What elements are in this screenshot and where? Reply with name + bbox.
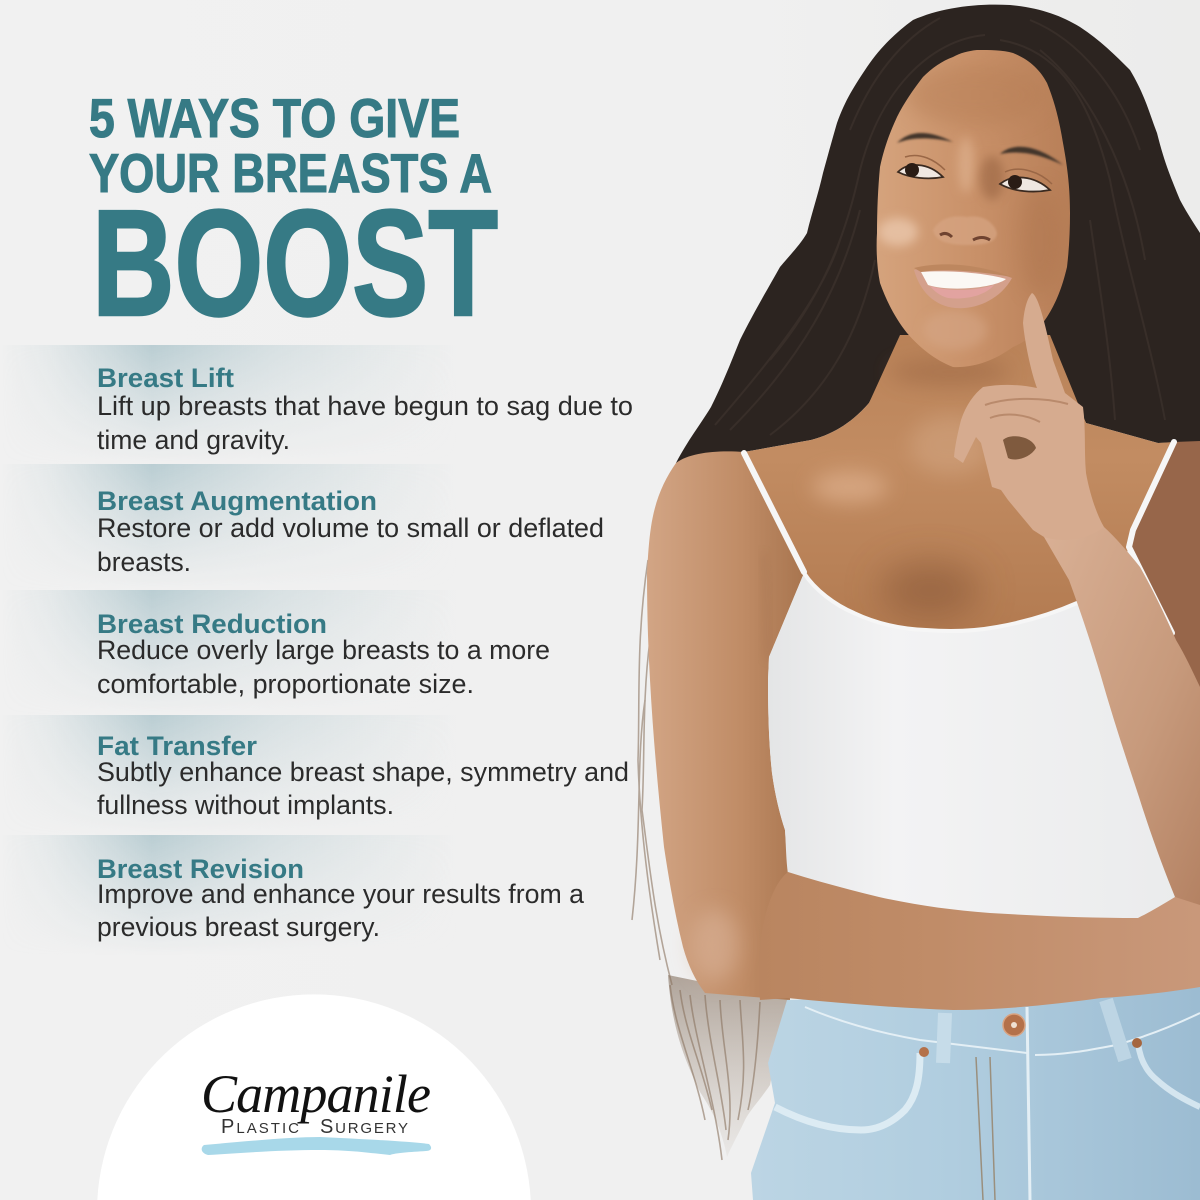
title: YOUR BREASTS A xyxy=(89,142,492,204)
logo: Campanile Plastic Surgery xyxy=(201,1064,431,1155)
nostrils xyxy=(940,233,990,240)
item: Breast Reduction: Reduce overly large breasts to a more xyxy=(97,635,550,665)
forehead tone xyxy=(908,70,995,120)
cheek and nose highlights xyxy=(878,137,987,350)
logo: Campanile Plastic Surgery: SURGERY xyxy=(320,1116,408,1138)
head and face xyxy=(876,50,1070,367)
item: Breast Augmentation: Restore or add volume to small or deflated xyxy=(97,513,604,543)
left arm and shoulder xyxy=(647,451,804,1000)
item: Breast Augmentation: Breast Augmentation xyxy=(97,486,377,516)
logo: Campanile Plastic Surgery: Campanile xyxy=(201,1064,431,1124)
long wispy hair behind the arm xyxy=(632,560,790,1160)
item: Fat Transfer: fullness without implants. xyxy=(97,790,394,820)
title: BOOST xyxy=(92,178,498,347)
item: Breast Reduction: comfortable, proportionate size. xyxy=(97,669,474,699)
nose xyxy=(933,216,997,245)
skin right of the strap xyxy=(1129,441,1200,700)
item: Fat Transfer: Fat Transfer xyxy=(97,731,257,761)
item: Breast Lift: Lift up breasts that have begun to sag due to xyxy=(97,391,633,421)
eye socket shadow xyxy=(980,156,1004,200)
chest light and shadow xyxy=(812,358,1010,618)
item: Fat Transfer xyxy=(97,731,629,820)
tank top xyxy=(768,573,1190,922)
item: Breast Reduction: Breast Reduction xyxy=(97,609,327,639)
title xyxy=(89,87,498,347)
eyes xyxy=(898,155,1052,192)
logo: Campanile Plastic Surgery: PLASTIC xyxy=(221,1116,299,1138)
elbow highlight xyxy=(691,909,739,981)
title: 5 WAYS TO GIVE xyxy=(89,87,460,149)
jeans details: waistband, pockets, fly, button xyxy=(775,1000,1200,1200)
photo: smiling woman with long dark hair xyxy=(632,5,1200,1200)
raised arm xyxy=(1044,527,1200,905)
item: Breast Lift: time and gravity. xyxy=(97,425,290,455)
item: Fat Transfer: Subtly enhance breast shape, symmetry and xyxy=(97,757,629,787)
item: Breast Revision xyxy=(97,854,585,942)
panel: list background bands xyxy=(30,345,410,938)
crossed forearm xyxy=(759,872,1200,1010)
logo badge: white circle xyxy=(97,994,531,1200)
jeans xyxy=(751,985,1200,1200)
hair mass xyxy=(676,5,1200,463)
hair highlights xyxy=(715,18,1165,435)
item: Breast Augmentation xyxy=(97,486,604,577)
item: Breast Revision: Improve and enhance your results from a xyxy=(97,879,585,909)
item: Breast Augmentation: breasts. xyxy=(97,547,191,577)
item: Breast Lift xyxy=(97,363,633,455)
item: Breast Revision: Breast Revision xyxy=(97,854,304,884)
eyebrows xyxy=(897,133,1063,165)
item: Breast Lift: Breast Lift xyxy=(97,363,234,393)
underarm crease xyxy=(763,553,768,660)
smile xyxy=(914,264,1012,308)
tank top neckline and straps xyxy=(744,442,1174,633)
item: Breast Revision: previous breast surgery. xyxy=(97,912,380,942)
item: Breast Reduction xyxy=(97,609,550,699)
neck and chest xyxy=(744,335,1174,640)
hand with pointing finger xyxy=(954,293,1104,540)
